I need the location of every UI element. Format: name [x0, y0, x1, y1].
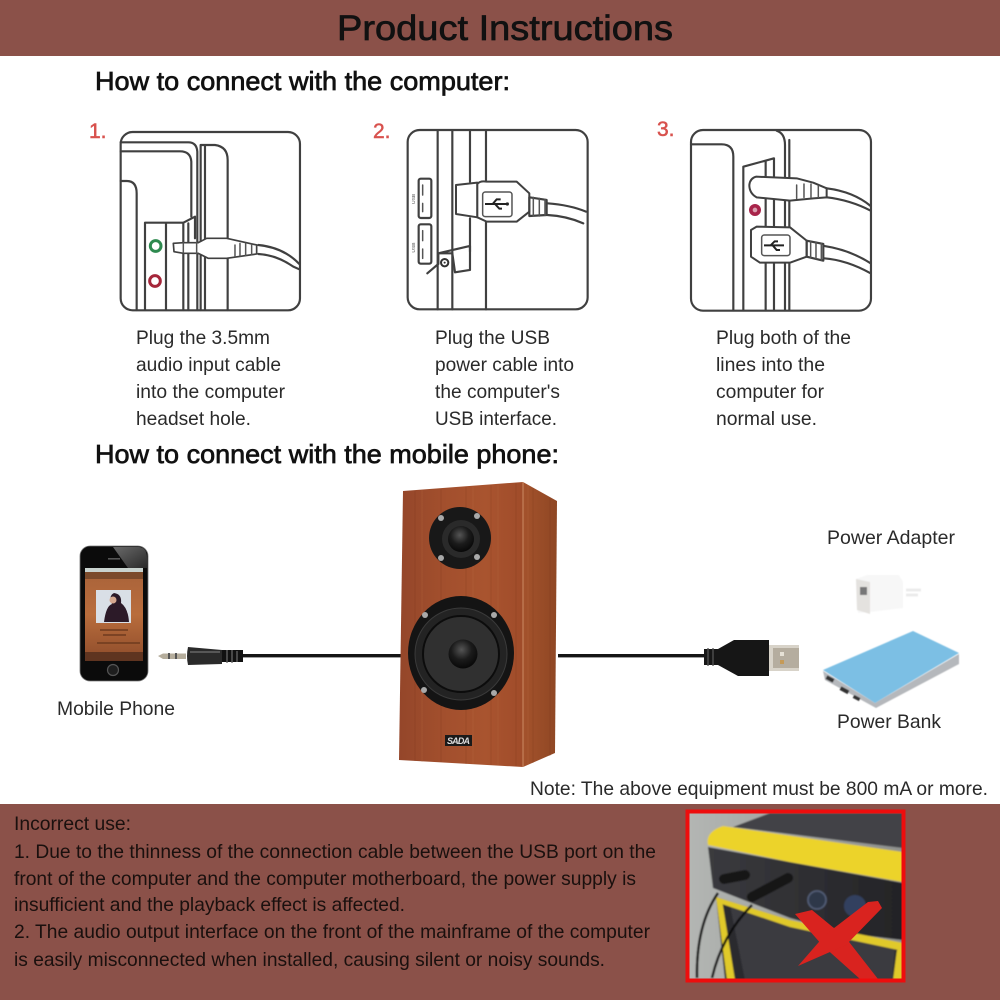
panel: incorrect use [0, 804, 1000, 1000]
incorrect use text: 1. Due to the thinness of the connection cable between the USB port on the [14, 841, 656, 863]
step 2 caption: Plug the USB [435, 327, 550, 349]
step 3 caption: Plug both of the [716, 327, 851, 349]
step 1 caption [136, 327, 285, 430]
icon: power adapter [856, 575, 921, 614]
step 2 number: 2. [373, 120, 391, 143]
step 3 caption [716, 327, 851, 430]
audio cable with 3.5mm jack [158, 647, 403, 665]
incorrect use text: is easily misconnected when installed, causing silent or noisy sounds. [14, 949, 605, 971]
label: power adapter: Power Adapter [827, 527, 955, 549]
icon: power bank [823, 631, 959, 708]
step 1 caption: Plug the 3.5mm [136, 327, 270, 349]
step 2 caption: the computer's [435, 381, 560, 403]
step 3 caption: lines into the [716, 354, 825, 376]
incorrect use text: 2. The audio output interface on the front of the mainframe of the computer [14, 921, 650, 943]
step 1 caption: headset hole. [136, 408, 251, 430]
icon: mobile phone [80, 546, 148, 681]
incorrect use text: front of the computer and the computer motherboard, the power supply is [14, 868, 636, 890]
diagram: USB cable into computer: USB [411, 242, 417, 253]
cabinet side [523, 482, 557, 767]
step 2 caption: USB interface. [435, 408, 557, 430]
label: power bank: Power Bank [837, 711, 941, 733]
photo: incorrect front panel connection [688, 812, 904, 980]
label: mobile phone: Mobile Phone [57, 698, 175, 720]
heading: connect with the computer: How to connect with the computer: [95, 66, 510, 96]
incorrect use text: Incorrect use: [14, 813, 131, 835]
step 3 caption: normal use. [716, 408, 817, 430]
title: Product Instructions [337, 9, 673, 48]
diagram: USB cable into computer [408, 130, 588, 309]
diagram: USB cable into computer: USB [411, 193, 417, 204]
step 3 number: 3. [657, 118, 675, 141]
note: Note: The above equipment must be 800 mA or more. [530, 778, 988, 800]
step 2 caption: power cable into [435, 354, 574, 376]
step 1 [89, 120, 300, 430]
cabinet front [399, 482, 523, 767]
incorrect use text [14, 813, 656, 971]
diagram: audio cable into headset hole [121, 132, 300, 310]
woofer [408, 596, 514, 710]
incorrect use text: insufficient and the playback effect is affected. [14, 894, 405, 916]
heading: connect with the mobile phone: How to connect with the mobile phone: [95, 439, 559, 469]
step 1 caption: audio input cable [136, 354, 281, 376]
step 3 [657, 118, 871, 430]
tweeter [429, 507, 491, 569]
red cross [795, 901, 882, 979]
diagram: both cables plugged in [691, 130, 871, 311]
USB power cable [558, 640, 799, 676]
brand badge: SADA [447, 736, 470, 746]
header band [0, 0, 1000, 56]
step 2 caption [435, 327, 574, 430]
step 2 [373, 120, 588, 430]
speaker [399, 482, 557, 767]
step 1 number: 1. [89, 120, 107, 143]
step 3 caption: computer for [716, 381, 824, 403]
step 1 caption: into the computer [136, 381, 285, 403]
